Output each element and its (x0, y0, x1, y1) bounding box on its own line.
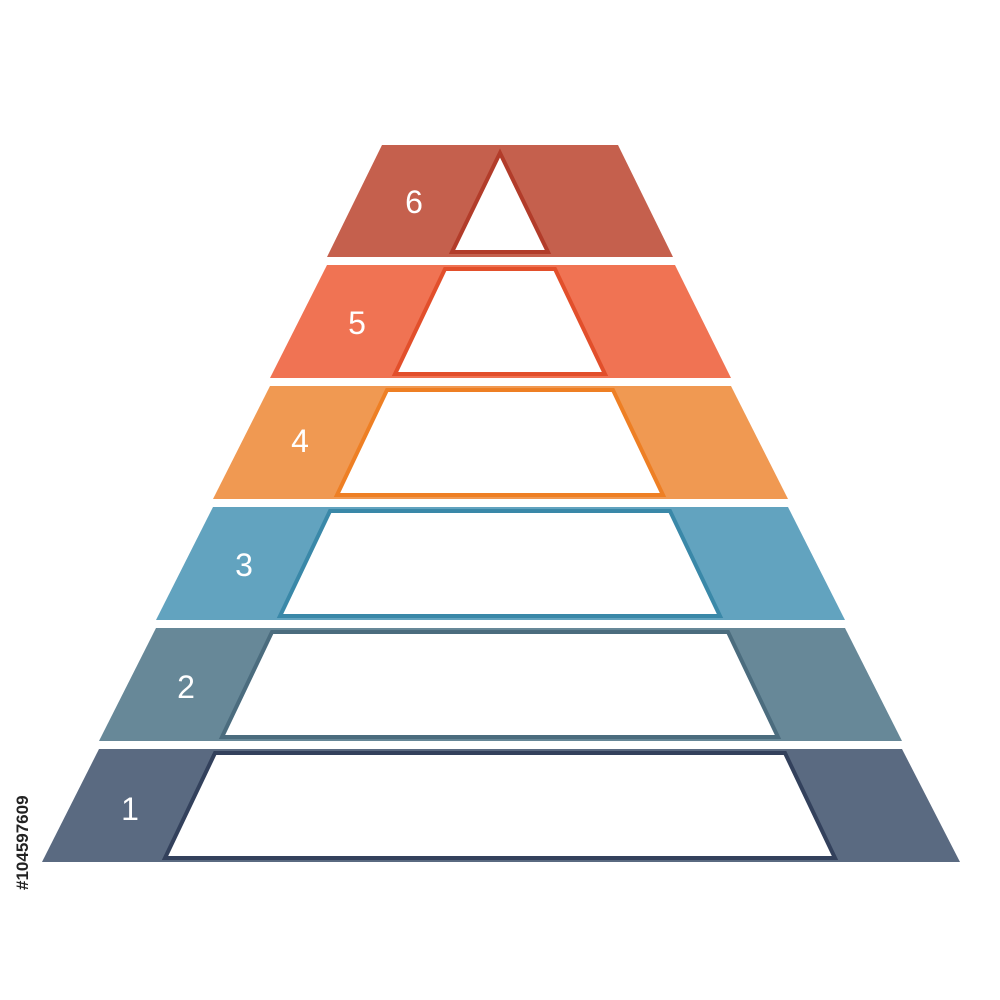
layer 6: 6 (405, 184, 423, 220)
pyramid (42, 145, 960, 862)
layer 4: 4 (291, 423, 309, 459)
layer 6 (327, 145, 673, 257)
layer 2: 2 (177, 669, 195, 705)
layer 4 (213, 386, 788, 499)
watermark id: #104597609 (13, 795, 32, 890)
layer 2 (99, 628, 902, 741)
layer 1 (42, 749, 960, 862)
layer 3 (156, 507, 845, 620)
layer 5 (270, 265, 731, 378)
layer 1: 1 (121, 791, 139, 827)
layer 5: 5 (348, 305, 366, 341)
layer 3: 3 (235, 547, 253, 583)
